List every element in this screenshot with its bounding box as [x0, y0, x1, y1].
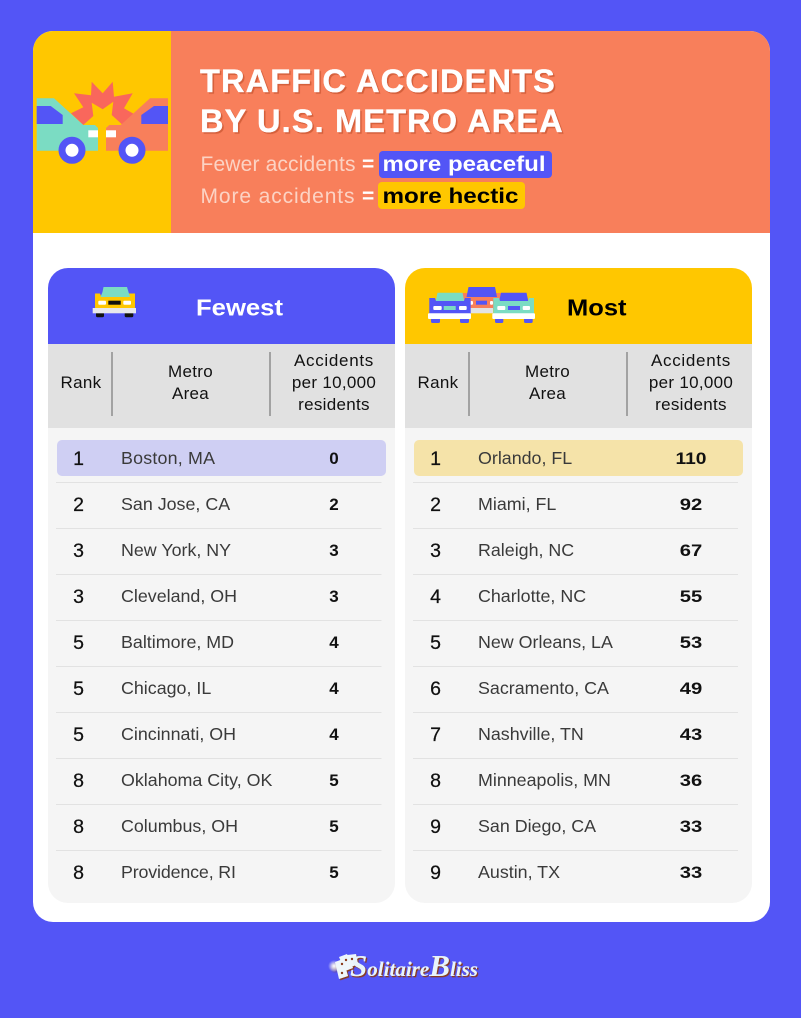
row 3: New York, NY — [121, 540, 231, 560]
table body background — [405, 428, 752, 903]
row 7: 5 — [73, 724, 84, 746]
subtitle: more accidents — [200, 182, 525, 209]
panel: yellow icon block — [33, 31, 171, 233]
row 8: 8 — [73, 770, 84, 792]
row 2: 92 — [680, 495, 702, 514]
row 10: Providence, RI — [121, 862, 236, 882]
row 9: 5 — [329, 817, 339, 836]
column header row — [48, 344, 395, 428]
subtitle: fewer accidents: more peaceful — [382, 153, 546, 176]
row 5 — [56, 620, 382, 654]
row 6: 6 — [430, 678, 441, 700]
row 10: 8 — [73, 862, 84, 884]
row 6: 49 — [680, 679, 702, 698]
row 8: Minneapolis, MN — [478, 770, 611, 790]
row 10: Austin, TX — [478, 862, 560, 882]
row 3: 67 — [680, 541, 702, 560]
row 1: Boston highlighted — [57, 440, 386, 476]
row 2: 2 — [73, 494, 84, 516]
column header row: Metro — [525, 362, 570, 381]
row 10: 33 — [680, 863, 702, 882]
subtitle: fewer accidents: Fewer accidents — [200, 153, 356, 176]
row 10: 5 — [329, 863, 339, 882]
row 6: Sacramento, CA — [478, 678, 609, 698]
row 5: Baltimore, MD — [121, 632, 234, 652]
row 7: 4 — [329, 725, 339, 744]
row 7: Nashville, TN — [478, 724, 584, 744]
row 8: Oklahoma City, OK — [121, 770, 272, 790]
row 6: 4 — [329, 679, 339, 698]
row 7: Cincinnati, OH — [121, 724, 236, 744]
fewest banner — [48, 268, 395, 344]
row 7 — [413, 712, 738, 746]
panel: fewest table — [48, 268, 395, 903]
column header row: per 10,000 — [292, 373, 376, 392]
row 1: Boston highlighted: 1 — [73, 448, 84, 470]
row 9: 8 — [73, 816, 84, 838]
right car — [492, 293, 535, 323]
row 6 — [56, 666, 382, 700]
row 6: Chicago, IL — [121, 678, 211, 698]
row 6 — [413, 666, 738, 700]
row 1: Orlando highlighted: 1 — [430, 448, 441, 470]
row 8 — [56, 758, 382, 792]
icon: traffic jam cars — [428, 287, 535, 323]
column header row: Accidents — [651, 351, 731, 370]
row 2: San Jose, CA — [121, 494, 230, 514]
table body background — [48, 428, 395, 903]
subtitle: more accidents: More accidents — [200, 185, 354, 208]
most banner — [405, 268, 752, 344]
icon: playing cards — [328, 954, 358, 979]
column header row: per 10,000 — [649, 373, 733, 392]
header banner — [33, 31, 770, 233]
row 9: Columbus, OH — [121, 816, 238, 836]
row 3: Raleigh, NC — [478, 540, 574, 560]
row 3 — [413, 528, 738, 562]
column header row: Metro — [168, 362, 213, 381]
row 7: 43 — [680, 725, 702, 744]
row 9 — [56, 804, 382, 838]
row 2: 2 — [329, 495, 339, 514]
row 4: 4 — [430, 586, 441, 608]
row 5: 4 — [329, 633, 339, 652]
column header row: Rank — [61, 373, 102, 392]
row 10: 9 — [430, 862, 441, 884]
row 8: 36 — [680, 771, 702, 790]
row 8 — [413, 758, 738, 792]
row 5: 5 — [73, 632, 84, 654]
row 9: 33 — [680, 817, 702, 836]
column header row: residents — [655, 395, 727, 414]
logo wordmark: SolitaireBliss — [350, 948, 478, 983]
icon: two cars crashing — [37, 82, 168, 160]
column header row: Area — [172, 384, 209, 403]
row 4: 3 — [73, 586, 84, 608]
row 5: 53 — [680, 633, 702, 652]
row 4 — [56, 574, 382, 608]
row 1: Orlando highlighted: Orlando, FL — [478, 448, 572, 468]
heading: fewest: Fewest — [196, 294, 283, 320]
column header row: Area — [529, 384, 566, 403]
title: TRAFFIC ACCIDENTS — [200, 63, 556, 99]
subtitle: fewer accidents — [200, 151, 552, 178]
row 9 — [413, 804, 738, 838]
row 4: 3 — [329, 587, 339, 606]
row 8: 8 — [430, 770, 441, 792]
icon: taxi — [93, 287, 136, 317]
heading: most: Most — [567, 294, 627, 320]
row 1: Boston highlighted: Boston, MA — [121, 448, 215, 468]
panel: orange title block — [171, 31, 770, 233]
subtitle: more accidents: more hectic — [382, 185, 519, 208]
column header row: Accidents — [294, 351, 374, 370]
row 3: 3 — [430, 540, 441, 562]
row 1: Boston highlighted: 0 — [329, 449, 339, 468]
row 3 — [56, 528, 382, 562]
row 1: Orlando highlighted — [414, 440, 743, 476]
row 4: Charlotte, NC — [478, 586, 586, 606]
left car — [428, 293, 471, 323]
subtitle: fewer accidents: = — [362, 153, 374, 176]
row 3: 3 — [73, 540, 84, 562]
row 5 — [413, 620, 738, 654]
row 9: San Diego, CA — [478, 816, 596, 836]
column header row — [405, 344, 752, 428]
row 10 — [413, 850, 738, 884]
row 4: Cleveland, OH — [121, 586, 237, 606]
row 4: 55 — [680, 587, 702, 606]
row 3: 3 — [329, 541, 339, 560]
row 4 — [413, 574, 738, 608]
row 2 — [56, 482, 382, 516]
row 9: 9 — [430, 816, 441, 838]
row 5: 5 — [430, 632, 441, 654]
row 2: 2 — [430, 494, 441, 516]
row 7 — [56, 712, 382, 746]
row 10 — [56, 850, 382, 884]
center car — [462, 287, 502, 313]
logo: SolitaireBliss — [328, 948, 478, 983]
subtitle: more accidents: = — [362, 185, 374, 208]
row 5: New Orleans, LA — [478, 632, 613, 652]
column header row: residents — [298, 395, 370, 414]
row 2 — [413, 482, 738, 516]
row 8: 5 — [329, 771, 339, 790]
row 2: Miami, FL — [478, 494, 556, 514]
row 7: 7 — [430, 724, 441, 746]
panel: most table — [405, 268, 752, 903]
row 1: Orlando highlighted: 110 — [676, 449, 706, 468]
title: BY U.S. METRO AREA — [200, 103, 564, 139]
row 6: 5 — [73, 678, 84, 700]
title — [200, 63, 564, 139]
column header row: Rank — [418, 373, 459, 392]
